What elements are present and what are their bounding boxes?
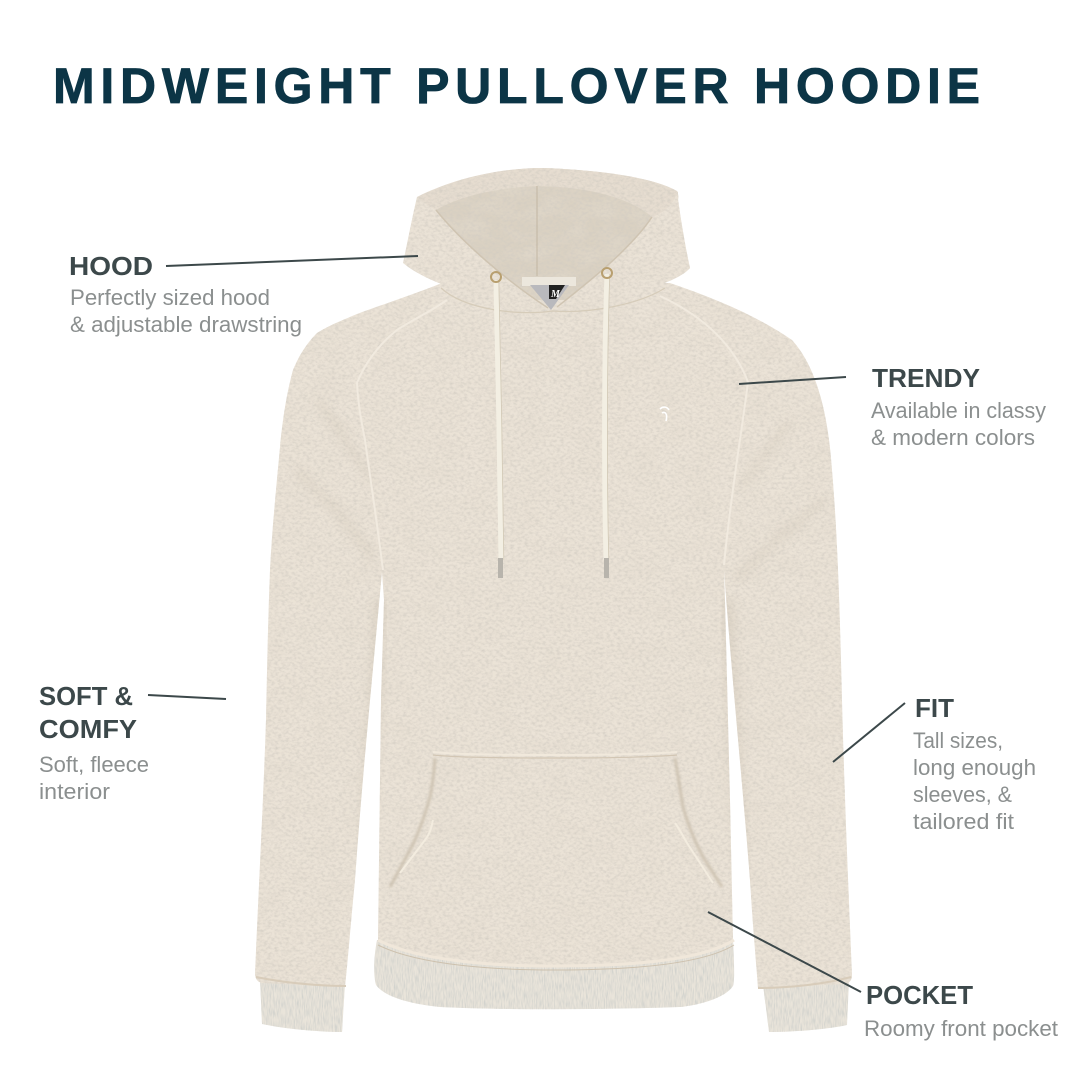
- callout: soft and comfy: [39, 681, 226, 804]
- neck label: [522, 277, 576, 310]
- callout: pocket: Roomy front pocket: [864, 1016, 1058, 1041]
- logo: [660, 407, 669, 421]
- hood rim: [417, 168, 678, 217]
- callout: pocket: POCKET: [866, 980, 973, 1010]
- callout: soft and comfy: interior: [39, 779, 110, 804]
- callout: hood: Perfectly sized hood: [70, 285, 270, 310]
- callout: hood: & adjustable drawstring: [70, 312, 302, 337]
- callout: soft and comfy: COMFY: [39, 714, 137, 744]
- title: MIDWEIGHT PULLOVER HOODIE: [53, 58, 980, 114]
- right cuff: [763, 980, 849, 1032]
- pocket: [390, 752, 722, 887]
- hood centre seam: [536, 186, 538, 276]
- callout: hood: [69, 251, 418, 337]
- left drawstring: [491, 272, 504, 578]
- callout: fit: tailored fit: [913, 809, 1014, 834]
- callout: fit: sleeves, &: [913, 782, 1012, 807]
- hoodie illustration: [255, 168, 852, 1032]
- callout: trendy: [739, 363, 1046, 450]
- seams and shading: [256, 210, 851, 988]
- left cuff: [260, 980, 345, 1032]
- callout: hood: HOOD: [69, 251, 153, 281]
- callout: pocket: [708, 912, 1058, 1041]
- callout: soft and comfy: Soft, fleece: [39, 752, 149, 777]
- callout: fit: FIT: [915, 693, 954, 723]
- fold shading: [295, 400, 825, 900]
- right drawstring: [602, 268, 612, 578]
- callout: fit: [833, 693, 1036, 834]
- hood interior: [417, 168, 678, 300]
- callout: fit: Tall sizes,: [913, 728, 1003, 753]
- callout: fit: long enough: [913, 755, 1036, 780]
- hem rib: [374, 940, 734, 1009]
- sweatshirt body and sleeves: [255, 283, 852, 988]
- hood left panel: [403, 197, 548, 311]
- neck label: M: [550, 289, 561, 300]
- hood right panel: [557, 191, 690, 309]
- callout: trendy: Available in classy: [871, 398, 1046, 423]
- callout: trendy: & modern colors: [871, 425, 1035, 450]
- callout: soft and comfy: SOFT &: [39, 681, 133, 711]
- callout: trendy: TRENDY: [872, 363, 980, 393]
